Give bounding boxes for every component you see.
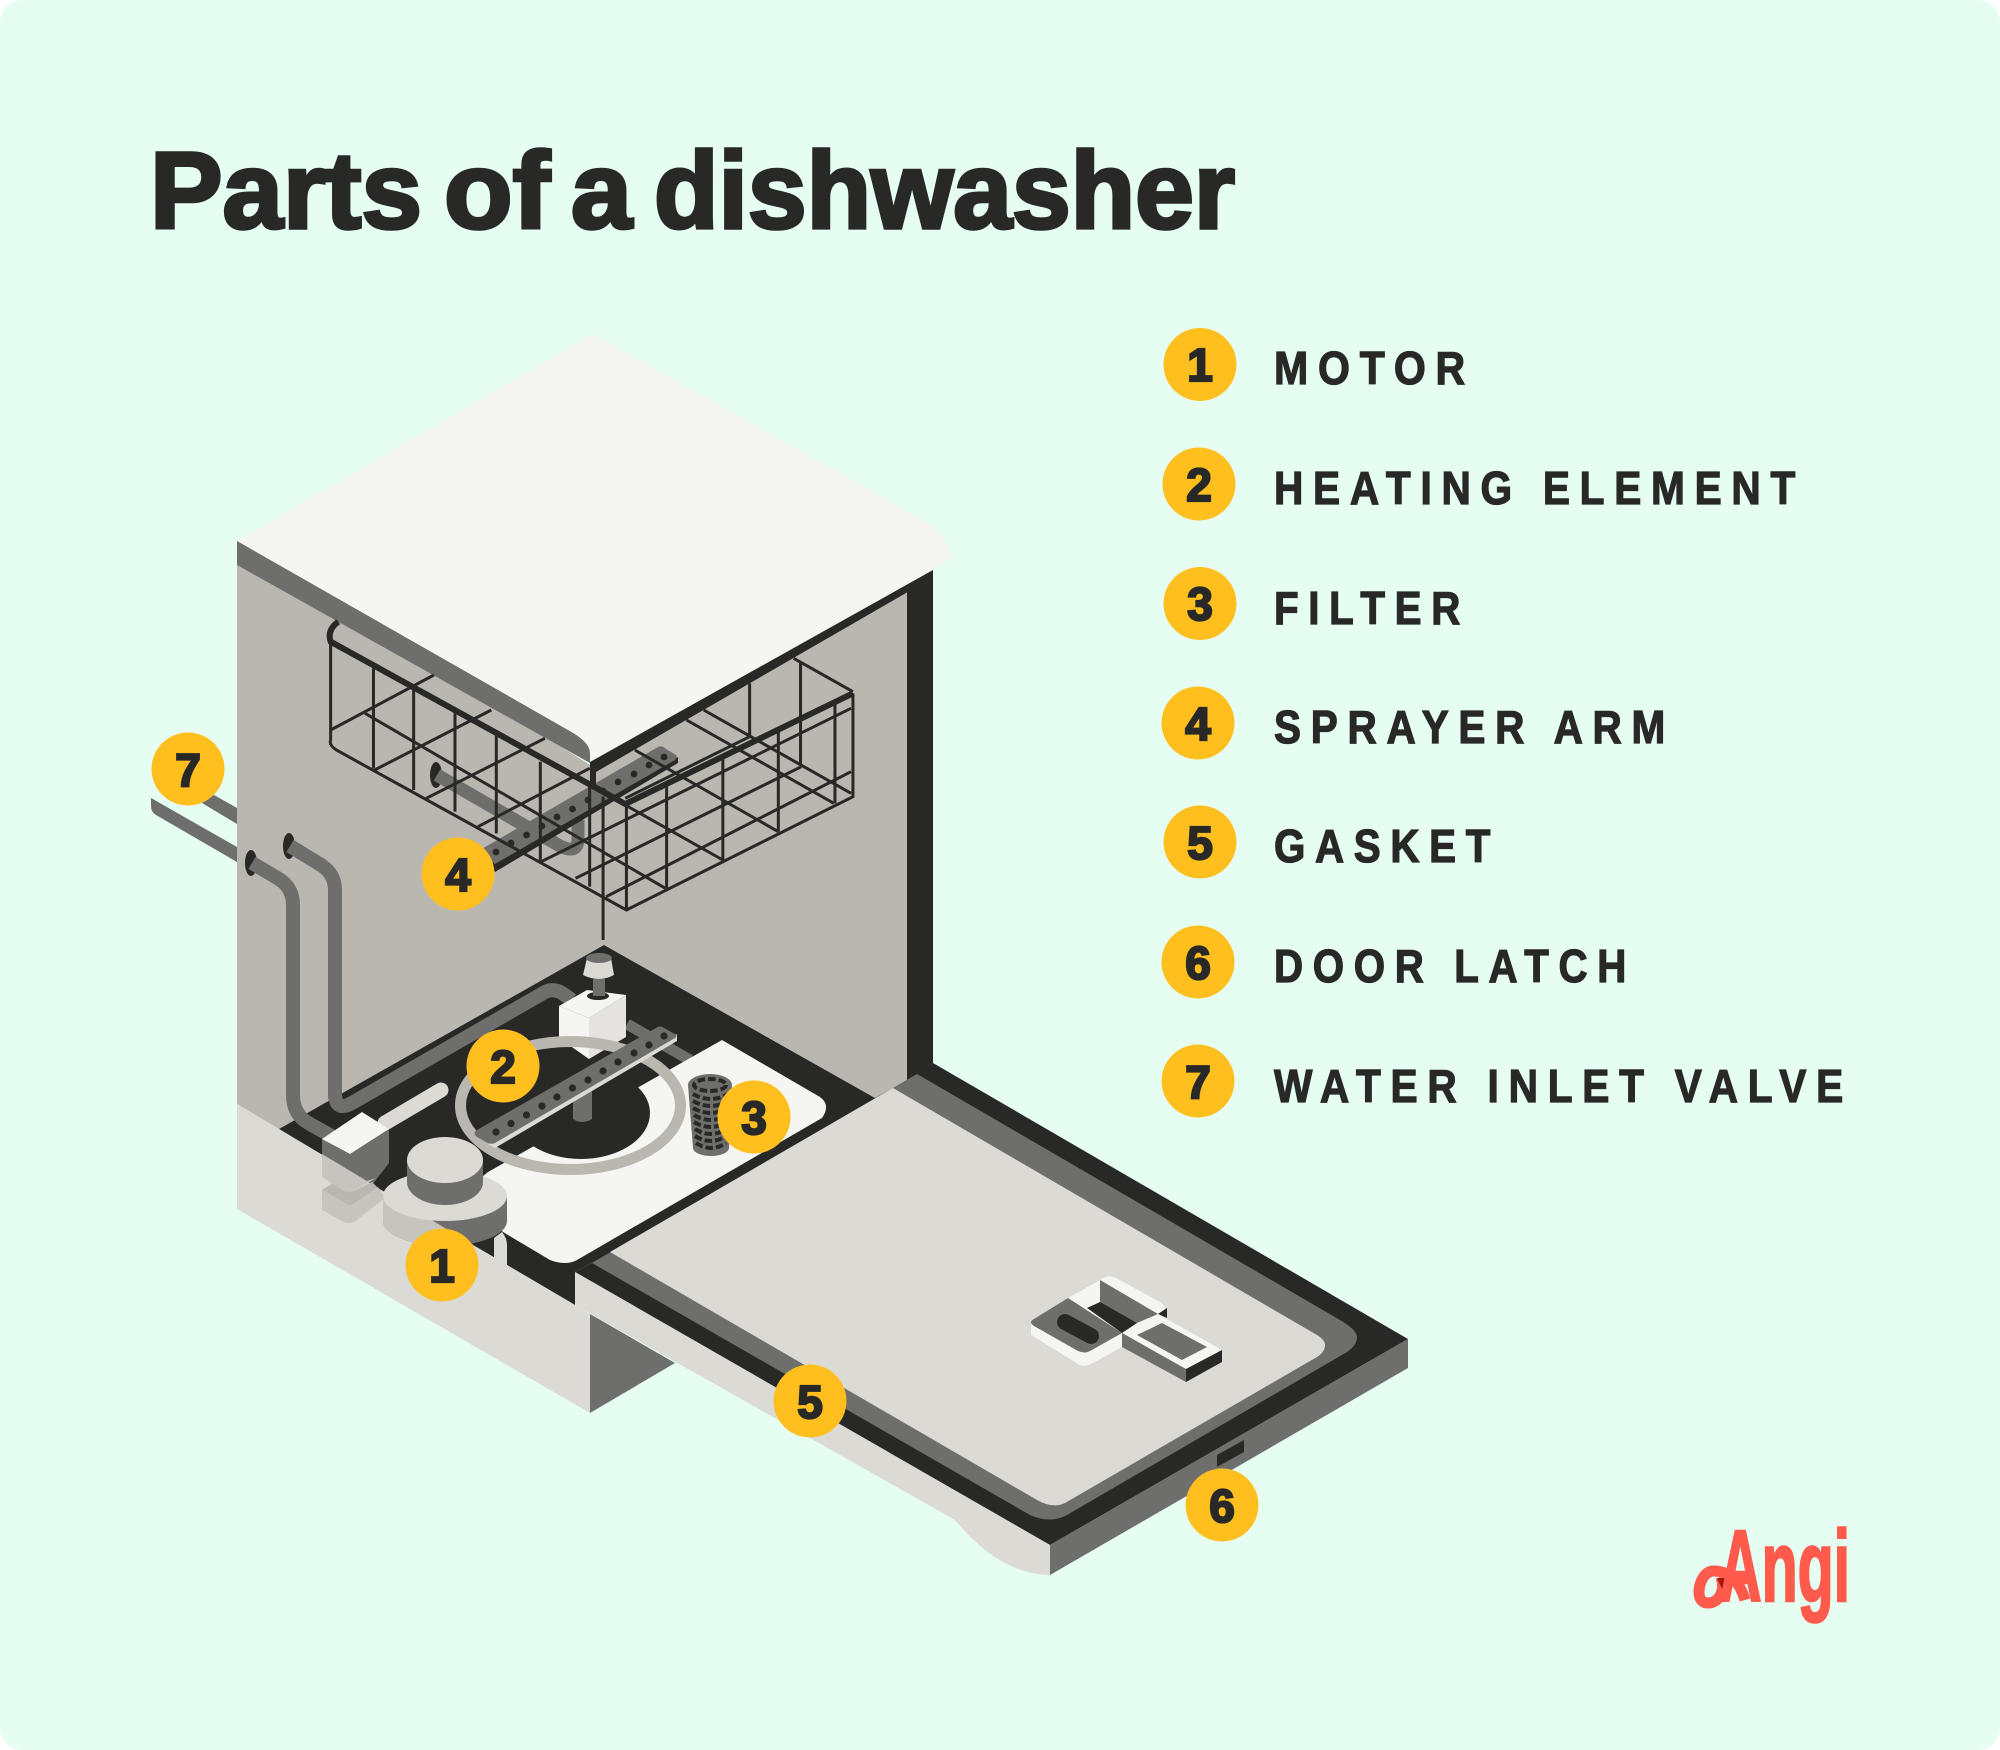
lower sprayer arm bbox=[474, 1026, 677, 1148]
legend item 6: 6 bbox=[1185, 937, 1211, 989]
badge 2 on diagram: 2 bbox=[490, 1041, 516, 1093]
door latch slot bbox=[1217, 1440, 1244, 1467]
legend item 1: MOTOR bbox=[1274, 342, 1475, 394]
cabinet floor bbox=[237, 945, 893, 1305]
cabinet top bbox=[237, 334, 952, 787]
badge 7 on diagram bbox=[152, 732, 224, 806]
title: a bbox=[571, 130, 633, 252]
badge 4 on diagram: 4 bbox=[445, 849, 471, 901]
badge 5 on diagram: 5 bbox=[797, 1376, 823, 1428]
badge 6 on diagram bbox=[1186, 1468, 1258, 1542]
badge 2 on diagram bbox=[466, 1030, 540, 1102]
legend item 3: FILTER bbox=[1274, 582, 1470, 634]
valve box bbox=[322, 1112, 389, 1185]
legend item 7 bbox=[1162, 1044, 1853, 1118]
legend item 4: SPRAYER ARM bbox=[1274, 701, 1675, 753]
title: Parts bbox=[150, 130, 422, 252]
door bbox=[575, 1063, 1408, 1575]
title: dishwasher bbox=[654, 130, 1235, 252]
legend item 3: 3 bbox=[1187, 578, 1213, 630]
Angi logo: Angi bbox=[1719, 1511, 1850, 1623]
badge 1 on diagram bbox=[406, 1228, 478, 1302]
title bbox=[150, 130, 1235, 252]
badge 3 on diagram: 3 bbox=[741, 1092, 767, 1144]
motor bracket bbox=[494, 1232, 507, 1265]
supply rod bbox=[627, 1024, 690, 1060]
upper spray pipe bbox=[430, 762, 578, 849]
legend item 1 bbox=[1164, 328, 1475, 401]
heating element ring bbox=[460, 1042, 680, 1170]
title: of bbox=[444, 130, 551, 252]
legend bbox=[1162, 328, 1853, 1118]
door front bbox=[575, 1272, 1050, 1575]
drain bbox=[512, 1067, 650, 1159]
legend item 6: DOOR LATCH bbox=[1274, 940, 1636, 992]
dishwasher illustration bbox=[151, 334, 1408, 1575]
cabinet walls bbox=[237, 541, 909, 1129]
badge 6 on diagram: 6 bbox=[1209, 1480, 1235, 1532]
tub tray bbox=[460, 1040, 826, 1263]
front base bbox=[237, 1104, 590, 1413]
filter bbox=[688, 1074, 732, 1156]
base side shadow bbox=[590, 1314, 675, 1413]
badge 1 on diagram: 1 bbox=[429, 1240, 455, 1292]
legend item 1: 1 bbox=[1187, 339, 1213, 391]
legend item 6 bbox=[1162, 926, 1636, 998]
pump box bbox=[559, 953, 626, 1059]
legend item 5: 5 bbox=[1187, 817, 1213, 869]
legend item 5 bbox=[1164, 806, 1500, 878]
motor bbox=[383, 1137, 507, 1257]
legend item 7: WATER INLET VALVE bbox=[1274, 1060, 1853, 1112]
badge 5 on diagram bbox=[774, 1364, 846, 1438]
legend item 2: 2 bbox=[1186, 459, 1212, 511]
badge 4 on diagram bbox=[422, 838, 494, 910]
side strip bbox=[385, 1090, 441, 1123]
dish rack bbox=[330, 622, 853, 940]
legend item 4: 4 bbox=[1185, 698, 1211, 750]
legend item 2: HEATING ELEMENT bbox=[1274, 462, 1805, 514]
door panel bbox=[610, 1088, 1325, 1505]
detergent dispenser bbox=[1031, 1276, 1222, 1382]
water inlet pipes outside cabinet bbox=[151, 795, 237, 862]
right black frame bbox=[907, 570, 933, 1080]
badge 3 on diagram bbox=[718, 1080, 790, 1154]
valve lower ghost shapes bbox=[322, 1154, 385, 1223]
plumbing pipes bbox=[252, 846, 572, 1138]
spray stem bbox=[573, 1090, 592, 1122]
pipe openings bbox=[245, 833, 295, 876]
legend item 2 bbox=[1162, 448, 1805, 520]
legend item 4 bbox=[1162, 686, 1675, 760]
legend item 5: GASKET bbox=[1274, 820, 1500, 872]
upper sprayer arm bbox=[480, 746, 678, 872]
door side edge bbox=[1050, 1339, 1408, 1575]
Angi logo bbox=[1699, 1511, 1850, 1623]
legend item 3 bbox=[1164, 567, 1470, 640]
legend item 7: 7 bbox=[1185, 1056, 1211, 1108]
badge 7 on diagram: 7 bbox=[175, 744, 201, 796]
